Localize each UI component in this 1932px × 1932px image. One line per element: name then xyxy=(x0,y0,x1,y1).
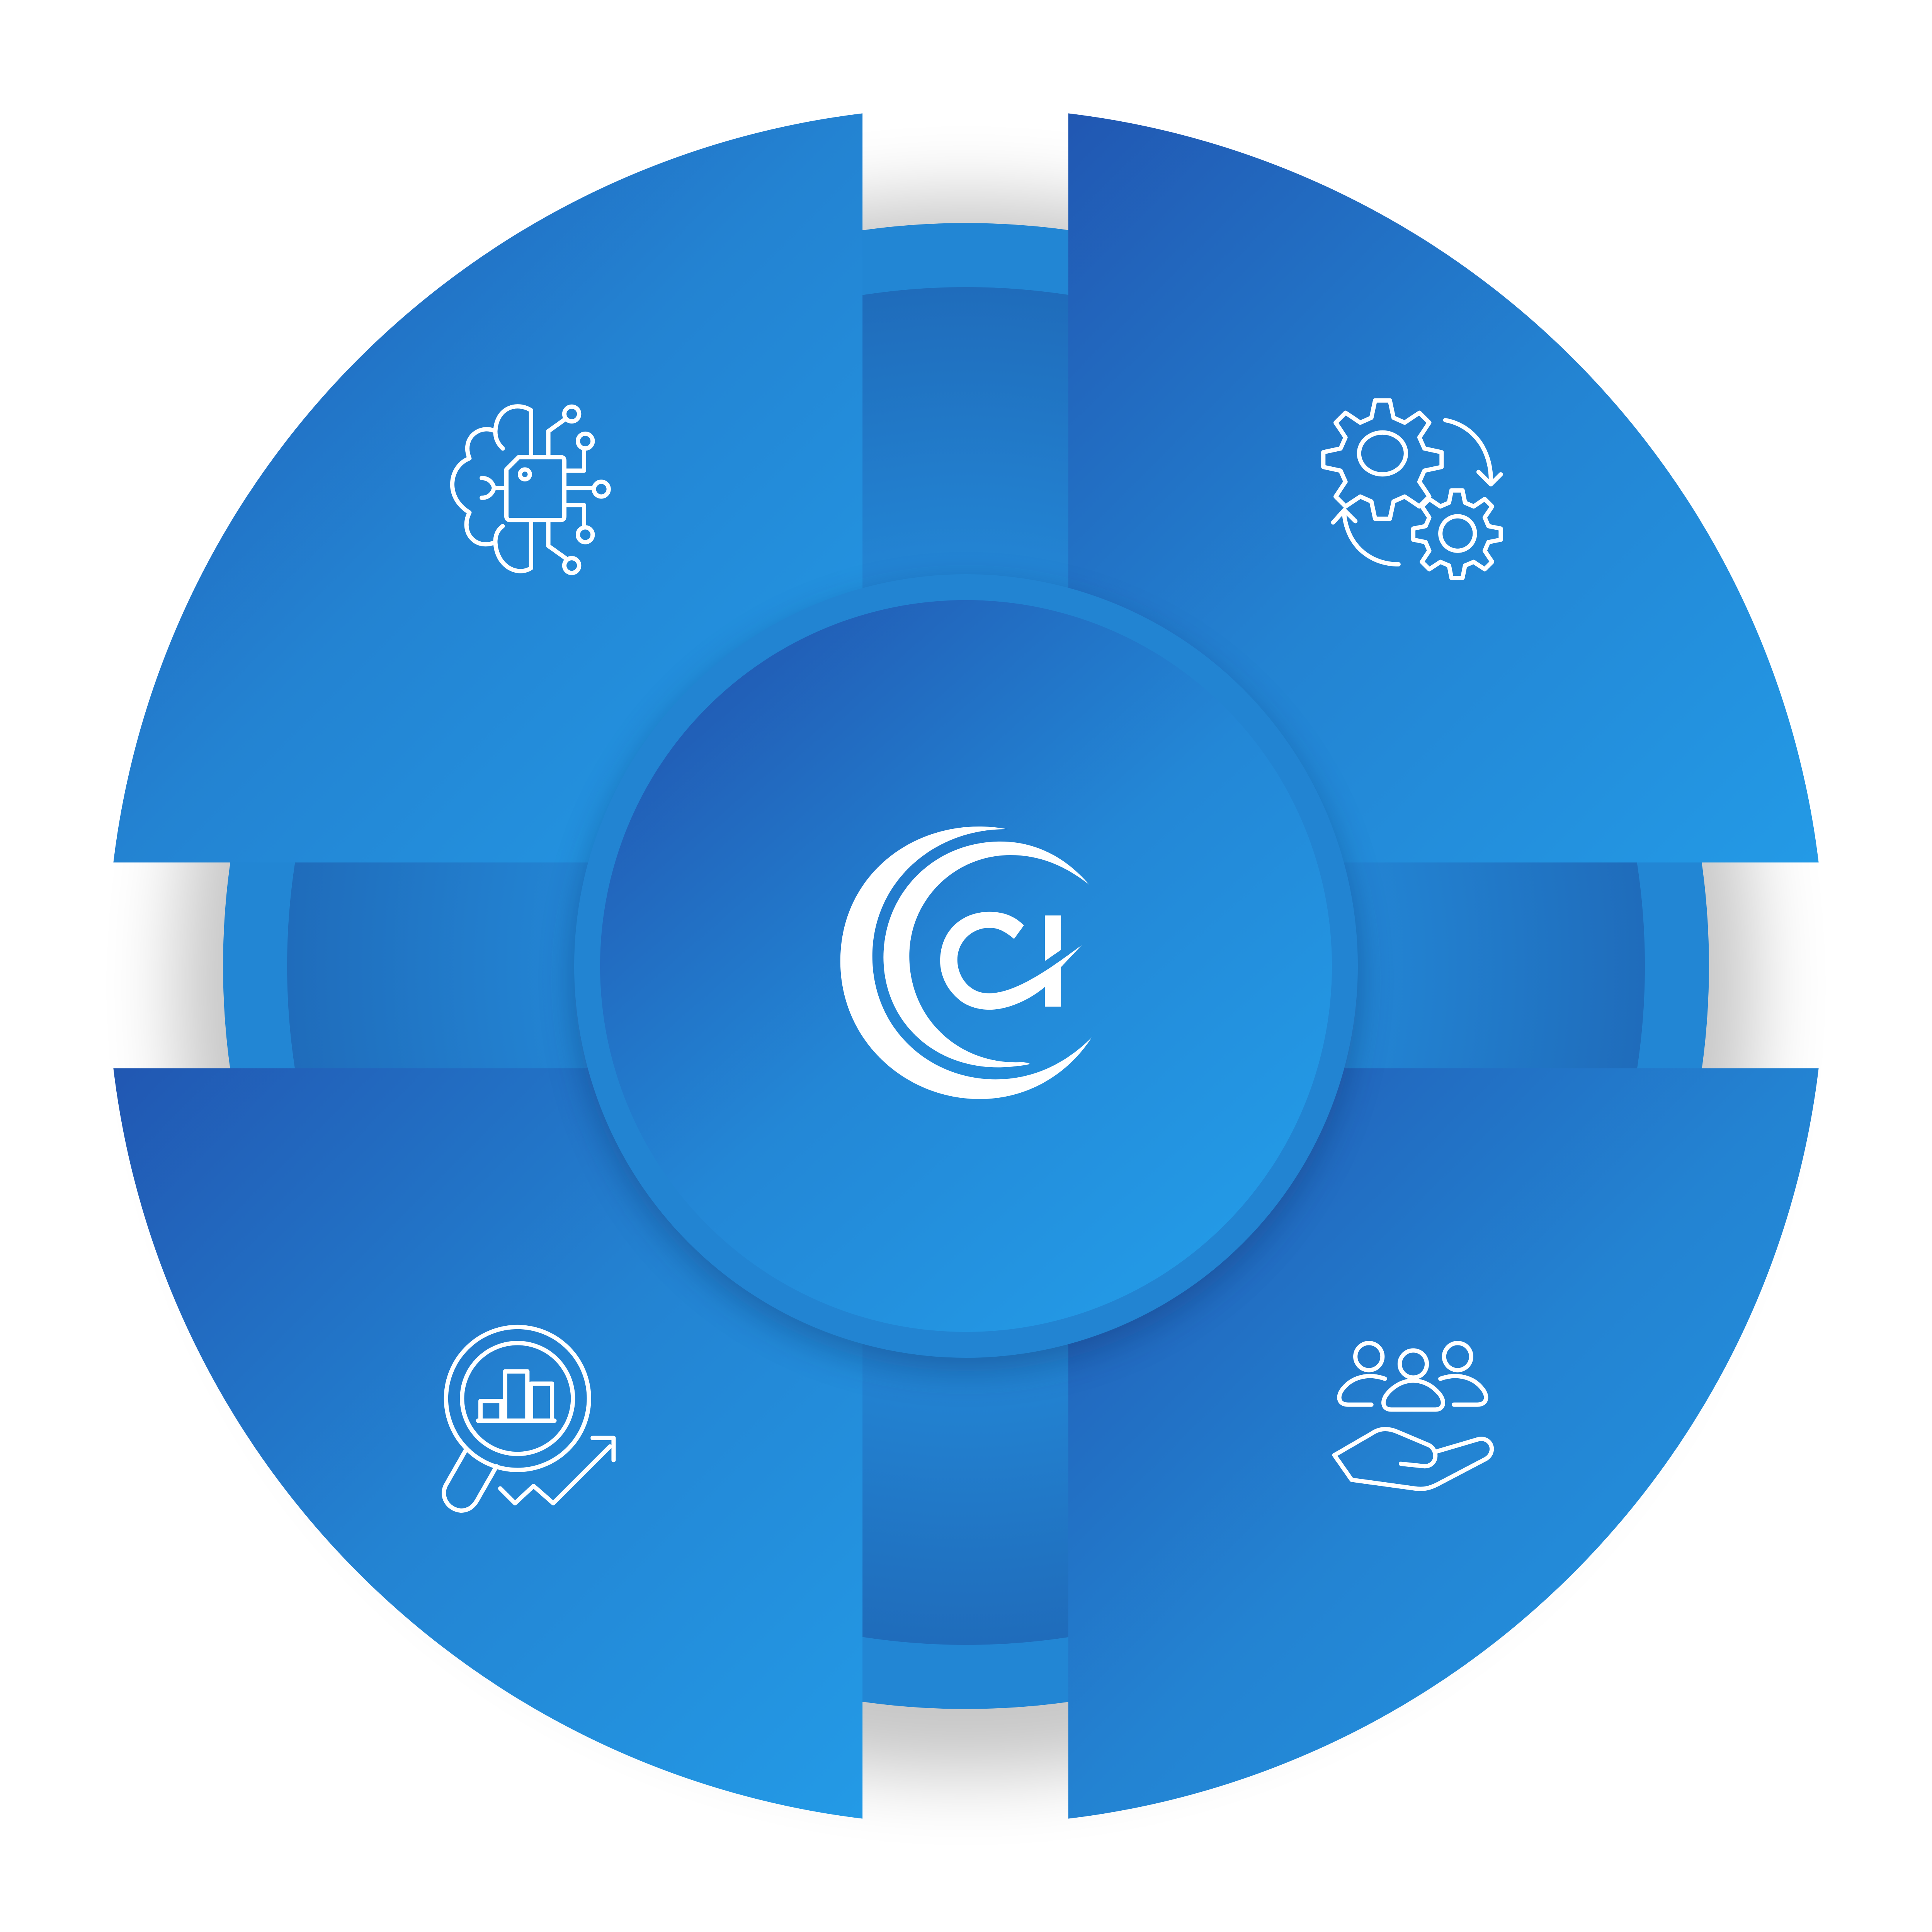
background ring xyxy=(223,223,1709,1709)
icon: gears with cycle arrows xyxy=(1323,400,1501,578)
icon: brain circuit xyxy=(452,406,609,573)
panel: top-left quadrant xyxy=(113,113,862,862)
logo: CI mark xyxy=(840,827,1092,1099)
outer shadow xyxy=(177,197,1755,1774)
icon: magnifier with chart and growth arrow xyxy=(444,1327,614,1510)
icon: people on hand xyxy=(1334,1343,1492,1489)
panel: bottom-right quadrant xyxy=(1068,1068,1819,1819)
center circle xyxy=(574,574,1358,1358)
panel: bottom-left quadrant xyxy=(113,1068,862,1819)
panel: top-right quadrant xyxy=(1068,113,1819,862)
center circle shadow xyxy=(574,588,1358,1371)
